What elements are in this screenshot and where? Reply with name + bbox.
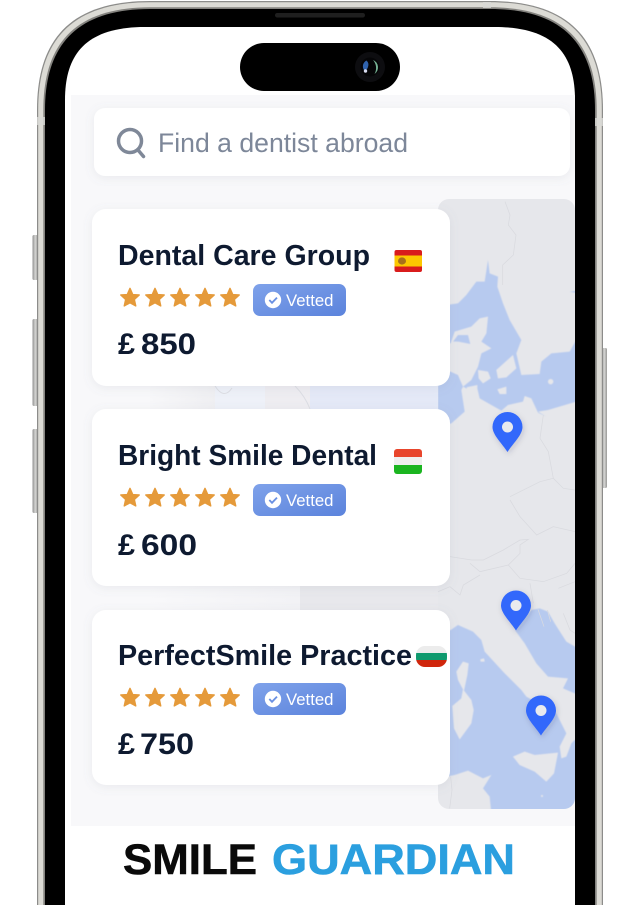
price: 600 bbox=[141, 529, 197, 562]
search bar bbox=[102, 128, 562, 178]
star rating bbox=[121, 488, 239, 506]
phone side buttons bbox=[32, 235, 607, 513]
price: £ bbox=[118, 529, 135, 562]
map: central European borders bbox=[430, 500, 575, 633]
price: £ bbox=[118, 728, 135, 761]
dynamic island with camera bbox=[240, 43, 400, 91]
price: 850 bbox=[141, 328, 196, 361]
icon: Spanish flag bbox=[394, 250, 422, 272]
search placeholder: Find a dentist abroad bbox=[158, 128, 408, 158]
clinic name: Bright Smile Dental bbox=[118, 440, 377, 472]
price bbox=[118, 333, 195, 354]
logo: Smile Guardian: SMILE bbox=[123, 836, 257, 884]
vetted badge bbox=[253, 683, 346, 715]
map: Mediterranean and Italy bbox=[449, 608, 575, 809]
map pin: central Italy bbox=[501, 590, 531, 630]
vetted badge: Vetted bbox=[286, 292, 334, 310]
clinic name: Dental Care Group bbox=[118, 240, 370, 272]
panel: card Bright Smile Dental bbox=[92, 409, 450, 586]
logo: Smile Guardian: GUARDIAN bbox=[272, 836, 515, 884]
panel: card PerfectSmile Practice bbox=[92, 610, 450, 785]
price bbox=[118, 534, 196, 556]
phone screen bbox=[65, 27, 581, 905]
price bbox=[118, 733, 193, 754]
map: northern seas and Baltic bbox=[438, 260, 581, 427]
vetted badge bbox=[253, 284, 346, 316]
map pin: Germany bbox=[492, 412, 522, 452]
icon: Hungarian flag bbox=[394, 449, 422, 474]
speaker grille bbox=[275, 13, 365, 18]
vetted badge: Vetted bbox=[286, 492, 334, 510]
app background bbox=[574, 95, 575, 99]
vetted badge bbox=[253, 484, 346, 516]
map pin: southern Italy bbox=[526, 696, 556, 736]
star rating bbox=[121, 688, 239, 706]
map of Europe bbox=[438, 199, 575, 809]
icon: Bulgarian flag bbox=[416, 646, 447, 667]
icon: magnifying glass bbox=[118, 130, 144, 156]
price: 750 bbox=[140, 728, 194, 761]
clinic name: PerfectSmile Practice bbox=[118, 640, 412, 672]
map: northern borders bbox=[503, 202, 575, 497]
star rating bbox=[121, 288, 239, 306]
faint map between cards bbox=[207, 386, 438, 610]
logo: Smile Guardian bbox=[124, 844, 512, 875]
price: £ bbox=[118, 328, 135, 361]
vetted badge: Vetted bbox=[286, 691, 334, 709]
panel: card Dental Care Group bbox=[92, 209, 450, 386]
